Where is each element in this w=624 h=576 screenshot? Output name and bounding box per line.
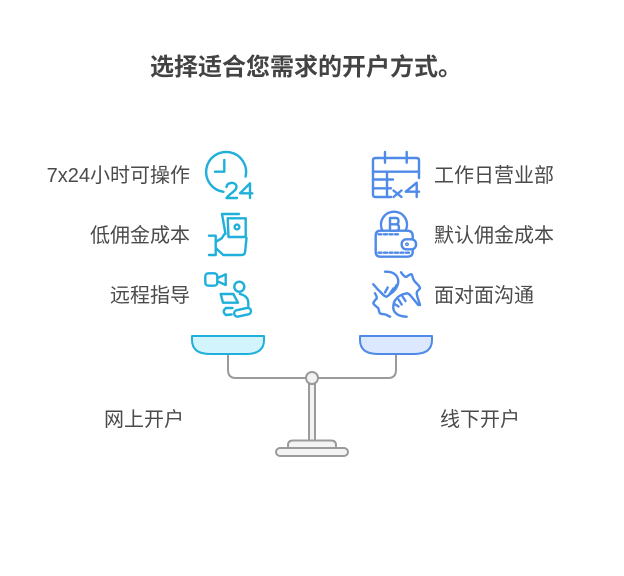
scale: pivot (306, 372, 318, 384)
scale: beam (228, 355, 396, 378)
label: online account: 网上开户 (104, 409, 184, 431)
scale: upper base (288, 440, 336, 448)
icon: calendar x4 (373, 152, 419, 197)
label: offline account: 线下开户 (440, 409, 520, 431)
title: 选择适合您需求的开户方式。 (150, 54, 462, 81)
label: face to face: 面对面沟通 (434, 285, 534, 307)
label: default commission: 默认佣金成本 (434, 225, 554, 247)
icon: handshake puzzle hands (373, 272, 420, 317)
scale: right pan (360, 336, 432, 354)
label: 7x24 hours: 7x24小时可操作 (47, 165, 190, 187)
scale: left pan (192, 336, 264, 354)
label: business hours: 工作日营业部 (434, 165, 554, 187)
scale: post (309, 384, 315, 441)
icon: video call and person at laptop (205, 273, 252, 317)
icon: wallet with coin (376, 212, 416, 257)
icon: clock 24 (206, 152, 252, 198)
label: remote guidance: 远程指导 (110, 285, 190, 307)
scale: lower base (276, 448, 348, 456)
label: low commission left: 低佣金成本 (90, 225, 190, 247)
icon: hand holding money (209, 214, 246, 255)
